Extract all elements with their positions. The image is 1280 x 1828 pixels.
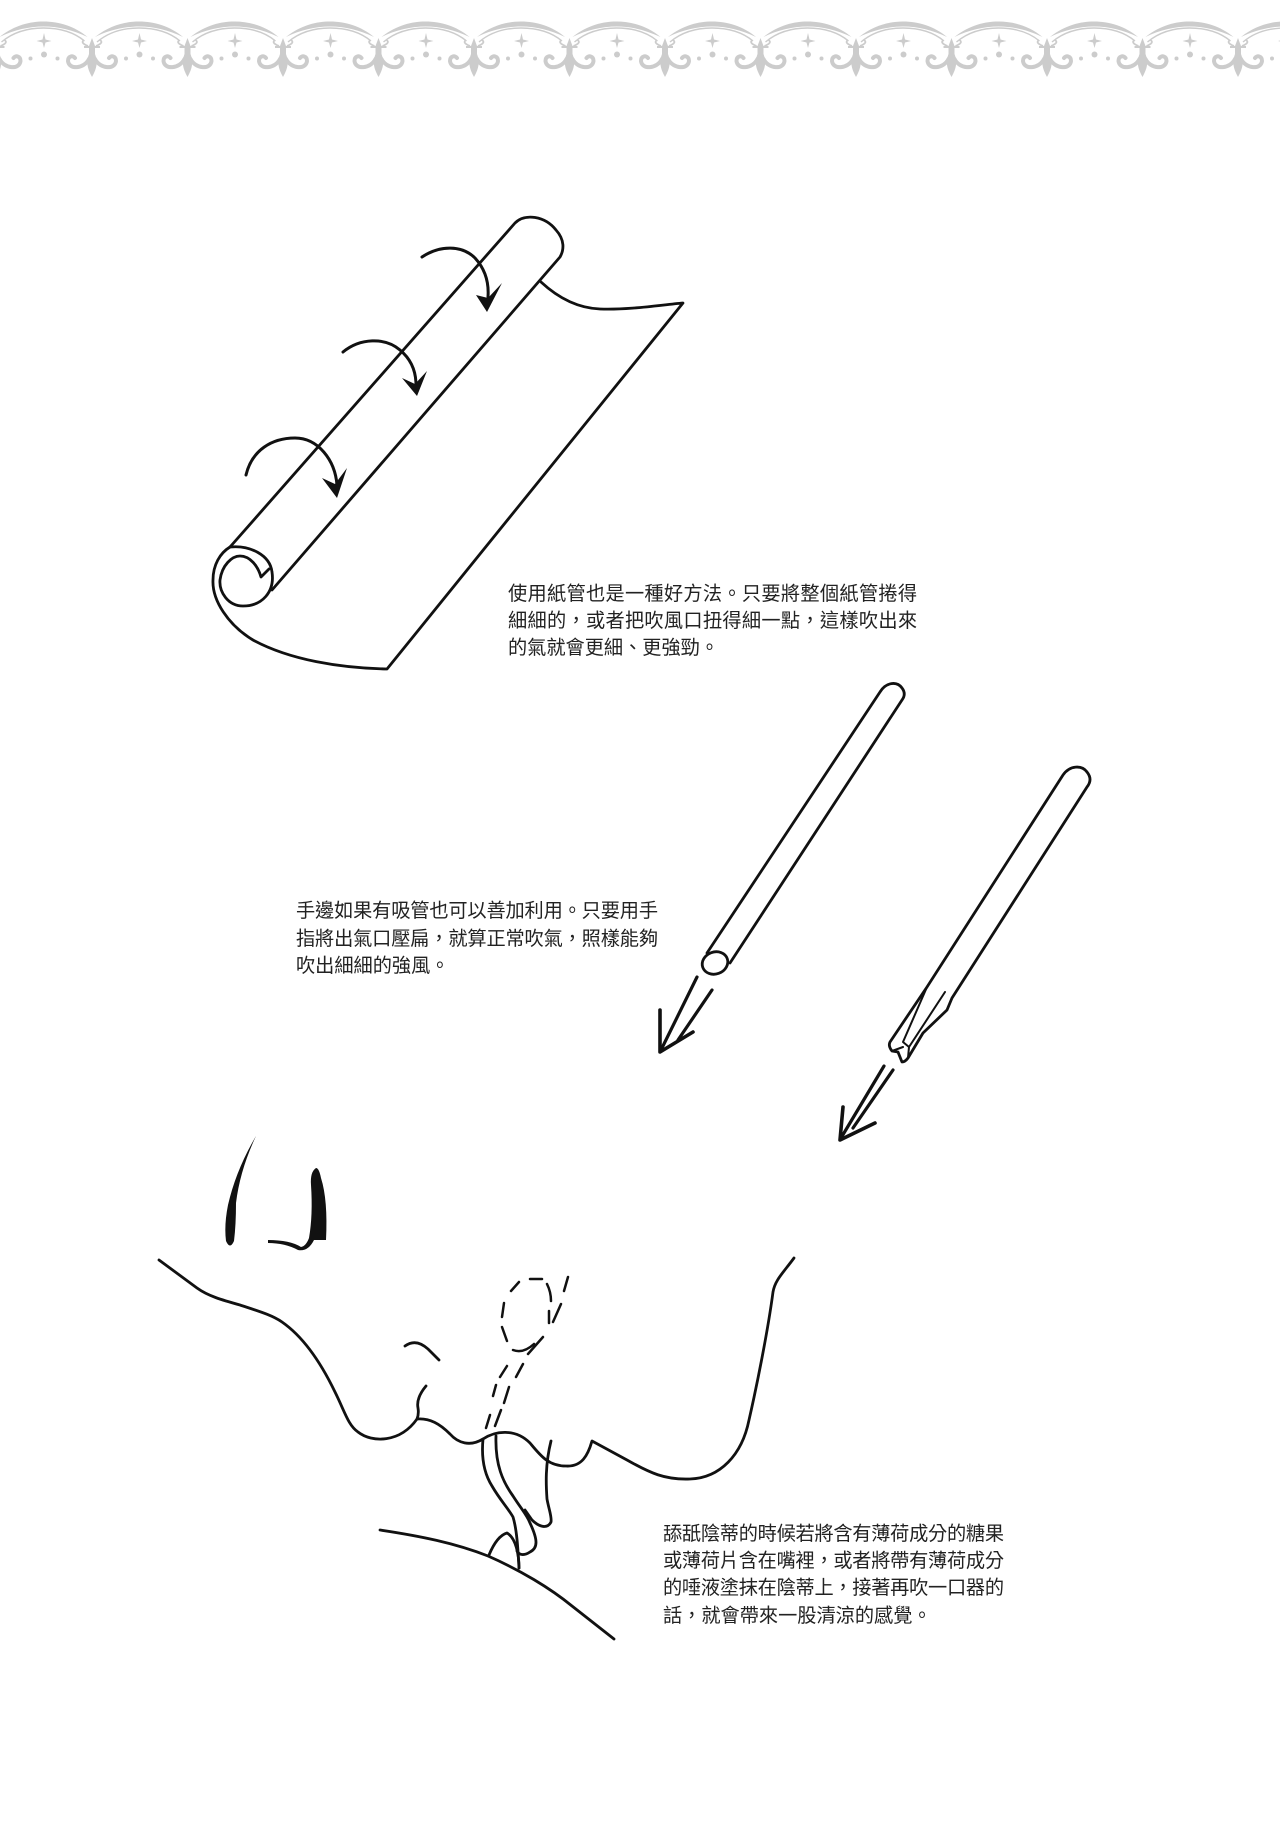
lower lip — [525, 1441, 551, 1526]
face outline — [159, 1258, 794, 1479]
arrow: middle curl — [343, 341, 427, 396]
tube opening spiral — [220, 547, 272, 606]
illustration: flattened straw — [840, 767, 1090, 1140]
tongue — [482, 1439, 519, 1568]
text: mint tip: 或薄荷片含在嘴裡，或者將帶有薄荷成分 — [663, 1550, 1004, 1572]
arrow: air flow — [660, 977, 712, 1052]
arrow: air flow — [840, 1066, 893, 1140]
eye lash right — [268, 1168, 326, 1250]
straw body — [707, 683, 904, 963]
paper sheet — [213, 282, 683, 669]
flattened tip creases — [892, 987, 945, 1058]
text: paper tube: 的氣就會更細、更強勁。 — [508, 637, 719, 659]
arrow: top curl — [422, 248, 502, 312]
text: straw: 指將出氣口壓扁，就算正常吹氣，照樣能夠 — [296, 928, 658, 950]
dashed candy in mouth — [486, 1277, 568, 1428]
decorative lace banner — [0, 22, 1280, 77]
illustration: rolling a paper tube — [213, 217, 683, 669]
text: mint tip: 舔舐陰蒂的時候若將含有薄荷成分的糖果 — [663, 1523, 1004, 1545]
eye lash left — [225, 1136, 256, 1246]
nostril line — [417, 1386, 426, 1419]
text: mint tip — [663, 1523, 1004, 1627]
text: mint tip: 的唾液塗抹在陰蒂上，接著再吹一口器的 — [663, 1577, 1004, 1599]
text: paper tube — [508, 583, 917, 659]
flattened straw body — [889, 767, 1090, 1062]
text: straw: 手邊如果有吸管也可以善加利用。只要用手 — [296, 900, 658, 922]
text: mint tip: 話，就會帶來一股清涼的感覺。 — [663, 1605, 932, 1627]
paper tube outline — [230, 217, 563, 590]
text: paper tube: 使用紙管也是一種好方法。只要將整個紙管捲得 — [508, 583, 917, 605]
arrow: lower curl — [246, 438, 347, 498]
illustration: round straw — [660, 683, 904, 1052]
illustration: face in profile — [159, 1136, 794, 1639]
body curve — [380, 1530, 614, 1639]
straw opening — [699, 948, 731, 978]
text: straw — [296, 900, 658, 977]
text: straw: 吹出細細的強風。 — [296, 955, 450, 977]
text: paper tube: 細細的，或者把吹風口扭得細一點，這樣吹出來 — [508, 610, 917, 632]
